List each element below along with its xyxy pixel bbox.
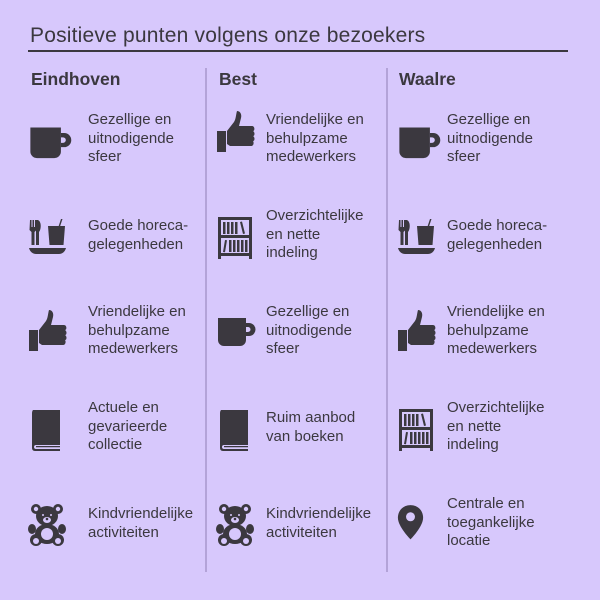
item: shelf: en nette bbox=[447, 418, 501, 434]
item: thumb: behulpzame bbox=[447, 322, 529, 338]
item: pin: Centrale en bbox=[447, 495, 525, 512]
item: book: Ruim aanbod bbox=[266, 409, 355, 426]
item: thumb: Vriendelijke en bbox=[88, 303, 186, 320]
item: cup bbox=[218, 303, 352, 357]
item: thumb: Vriendelijke en bbox=[266, 111, 364, 128]
item: cup: Gezellige en bbox=[266, 303, 349, 320]
item: thumb: behulpzame bbox=[266, 130, 348, 146]
item: bear: activiteiten bbox=[88, 524, 159, 540]
item: bear bbox=[28, 504, 193, 546]
panel: Waalre bbox=[398, 111, 547, 549]
item: thumb bbox=[29, 303, 186, 357]
item: bear bbox=[216, 504, 371, 546]
item: bear: Kindvriendelijke bbox=[266, 505, 371, 522]
item: cup: Gezellige en bbox=[447, 111, 530, 128]
item: pin bbox=[398, 495, 535, 549]
item: book bbox=[32, 399, 167, 453]
item: thumb: medewerkers bbox=[447, 340, 537, 357]
item: cup bbox=[399, 111, 533, 165]
item: book: gevarieerde bbox=[88, 418, 167, 434]
item: cup: uitnodigende bbox=[266, 322, 352, 338]
panel: Best bbox=[216, 111, 371, 546]
item: thumb: Vriendelijke en bbox=[447, 303, 545, 320]
item: bear: Kindvriendelijke bbox=[88, 505, 193, 522]
item: shelf: Overzichtelijke bbox=[447, 399, 545, 416]
item: horeca: gelegenheden bbox=[88, 236, 183, 252]
item: pin: toegankelijke bbox=[447, 514, 535, 530]
item: shelf: en nette bbox=[266, 226, 320, 242]
heading: Eindhoven: Eindhoven bbox=[31, 69, 120, 89]
item: horeca bbox=[398, 217, 547, 254]
item: cup: sfeer bbox=[88, 148, 121, 165]
heading: Best: Best bbox=[219, 69, 257, 89]
item: horeca: Goede horeca- bbox=[88, 217, 188, 234]
item: book: collectie bbox=[88, 436, 142, 453]
item: book: Actuele en bbox=[88, 399, 159, 416]
item: book bbox=[220, 409, 355, 451]
item: cup: uitnodigende bbox=[447, 130, 533, 146]
title: Positieve punten volgens onze bezoekers bbox=[30, 24, 425, 47]
panel: Eindhoven bbox=[28, 111, 193, 546]
item: book: van boeken bbox=[266, 428, 344, 444]
item: horeca bbox=[29, 217, 188, 254]
item: thumb: medewerkers bbox=[266, 148, 356, 165]
item: horeca: Goede horeca- bbox=[447, 217, 547, 234]
item: thumb bbox=[398, 303, 545, 357]
item: shelf bbox=[218, 207, 364, 261]
item: cup: Gezellige en bbox=[88, 111, 171, 128]
heading: Waalre: Waalre bbox=[399, 69, 456, 89]
item: thumb bbox=[217, 111, 364, 165]
item: cup: sfeer bbox=[447, 148, 480, 165]
item: shelf bbox=[399, 399, 545, 453]
item: cup: uitnodigende bbox=[88, 130, 174, 146]
item: thumb: medewerkers bbox=[88, 340, 178, 357]
item: cup: sfeer bbox=[266, 340, 299, 357]
item: pin: locatie bbox=[447, 532, 490, 549]
item: thumb: behulpzame bbox=[88, 322, 170, 338]
item: shelf: indeling bbox=[447, 436, 499, 453]
item: shelf: Overzichtelijke bbox=[266, 207, 364, 224]
item: bear: activiteiten bbox=[266, 524, 337, 540]
item: cup bbox=[30, 111, 174, 165]
item: horeca: gelegenheden bbox=[447, 236, 542, 252]
item: shelf: indeling bbox=[266, 244, 318, 261]
